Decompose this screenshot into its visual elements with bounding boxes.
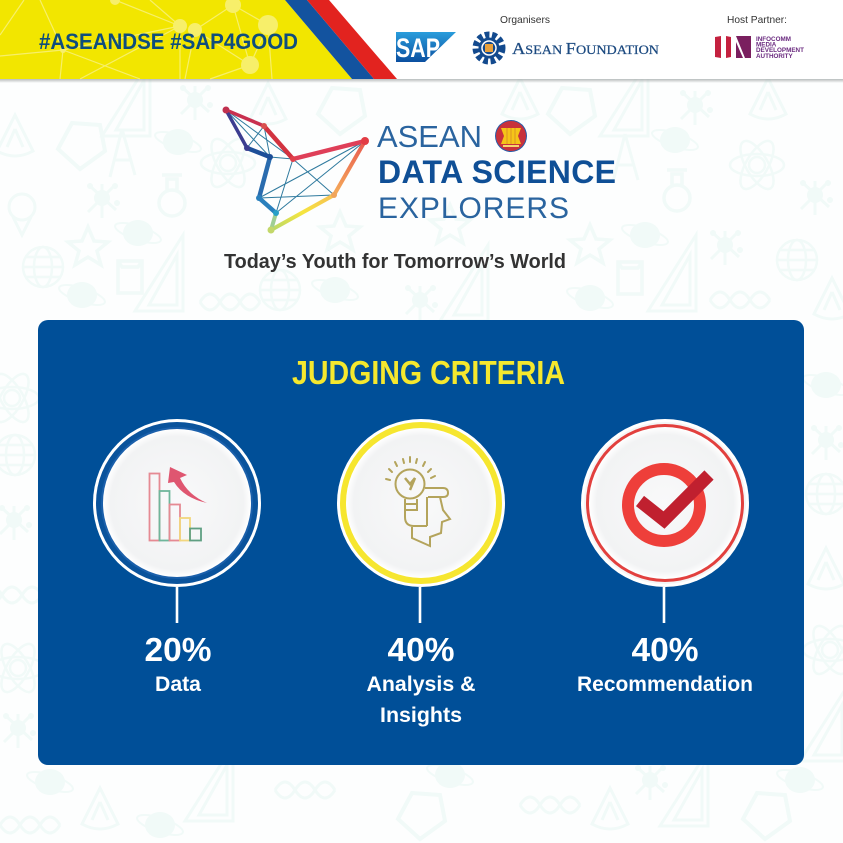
- hashtags: #ASEANDSE #SAP4GOOD: [39, 29, 298, 54]
- icon: check mark in red ring: [581, 419, 749, 587]
- icon: bar chart in blue ring: [93, 419, 261, 587]
- label: Analysis and Insights: Insights: [380, 704, 462, 727]
- logo wordmark: ASEAN: [377, 119, 482, 154]
- yellow header banner with network lines: [0, 0, 352, 79]
- header band: [0, 0, 843, 83]
- panel heading: JUDGING CRITERIA: [292, 354, 565, 391]
- icon: lightbulb and head in yellow ring: [337, 419, 505, 587]
- criterion: analysis and insights: [337, 419, 505, 727]
- label: Analysis and Insights: Analysis &: [366, 673, 476, 696]
- panel: judging criteria: [38, 320, 804, 765]
- host partner label: Host Partner:: [727, 14, 787, 26]
- logo: IMDA: [715, 36, 804, 60]
- diagonal blue and red stripes: [285, 0, 397, 79]
- icon: ASEAN emblem: [495, 120, 527, 152]
- organisers label: Organisers: [500, 14, 550, 26]
- logo: IMDA: DEVELOPMENT: [756, 47, 804, 54]
- logo wordmark: [377, 119, 616, 225]
- logo: ASEAN Foundation: ASEAN FOUNDATION: [512, 39, 660, 58]
- logo: IMDA: MEDIA: [756, 42, 777, 48]
- value: 40%: 40%: [632, 631, 698, 668]
- logo wordmark: DATA SCIENCE: [378, 154, 616, 190]
- label: Analysis and Insights: [366, 673, 476, 727]
- tagline: Today’s Youth for Tomorrow’s World: [224, 251, 566, 273]
- logo wordmark: EXPLORERS: [378, 192, 569, 225]
- label: Data: Data: [155, 673, 201, 696]
- label: Recommendation: Recommendation: [577, 673, 753, 696]
- criterion: data: [93, 419, 261, 696]
- logo: IMDA: INFOCOMM: [756, 36, 791, 43]
- value: 40%: 40%: [388, 631, 454, 668]
- logo: SAP: SAP: [396, 33, 440, 63]
- value: 20%: 20%: [144, 631, 212, 668]
- logo: data science explorers bird: [222, 106, 369, 234]
- logo: IMDA: AUTHORITY: [756, 53, 794, 60]
- criterion: recommendation: [577, 419, 753, 696]
- logo: ASEAN Foundation: [476, 35, 660, 61]
